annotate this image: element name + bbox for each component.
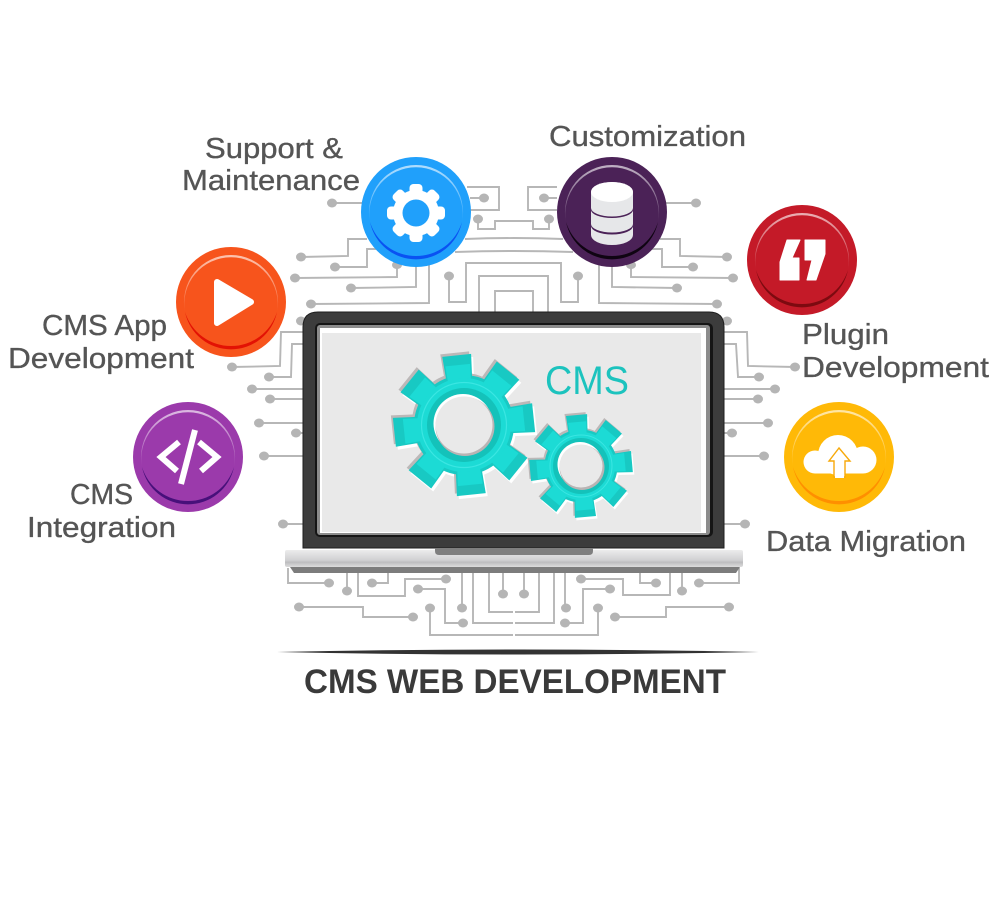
label: cms app development (8, 310, 194, 375)
icon: cloud upload (804, 435, 876, 478)
label: support and maintenance: Support & (205, 133, 343, 165)
badge: customization (557, 157, 667, 267)
label: support and maintenance (182, 133, 360, 197)
laptop notch (435, 548, 593, 555)
laptop lid (303, 312, 724, 548)
large gear (385, 346, 543, 505)
icon: database (591, 182, 633, 245)
circuit traces: top (290, 187, 738, 326)
label: cms app development: CMS App (42, 310, 167, 342)
icon: play (217, 282, 251, 323)
circuit traces: bottom (288, 568, 739, 635)
title: CMS WEB DEVELOPMENT (304, 663, 726, 701)
laptop (285, 312, 743, 573)
laptop bezel (315, 323, 713, 537)
label: cms app development: Development (8, 343, 194, 375)
circuit traces: right side (722, 332, 800, 528)
badge: cms integration (133, 402, 243, 512)
laptop base (285, 550, 743, 567)
label: plugin development (802, 319, 989, 384)
label: cms integration: CMS (70, 479, 133, 511)
label: cms integration (27, 479, 176, 544)
icon: code brackets (161, 430, 217, 484)
label: support and maintenance: Maintenance (182, 165, 360, 197)
label: customization: Customization (549, 121, 746, 153)
label: plugin development: Plugin (802, 319, 889, 351)
icon: quotation marks (780, 240, 825, 280)
badge: support and maintenance (361, 157, 471, 267)
title underline (277, 650, 759, 654)
icon: gear (387, 184, 445, 242)
label: cms integration: Integration (27, 512, 176, 544)
label: data migration: Data Migration (766, 526, 966, 558)
small gear (524, 409, 638, 524)
screen text: CMS: CMS (545, 359, 629, 403)
badge: cms app development (176, 247, 286, 357)
badge: plugin development (747, 205, 857, 315)
circuit traces: left side (227, 332, 306, 528)
laptop screen (322, 333, 701, 532)
label: plugin development: Development (802, 352, 989, 384)
badge: data migration (784, 402, 894, 512)
